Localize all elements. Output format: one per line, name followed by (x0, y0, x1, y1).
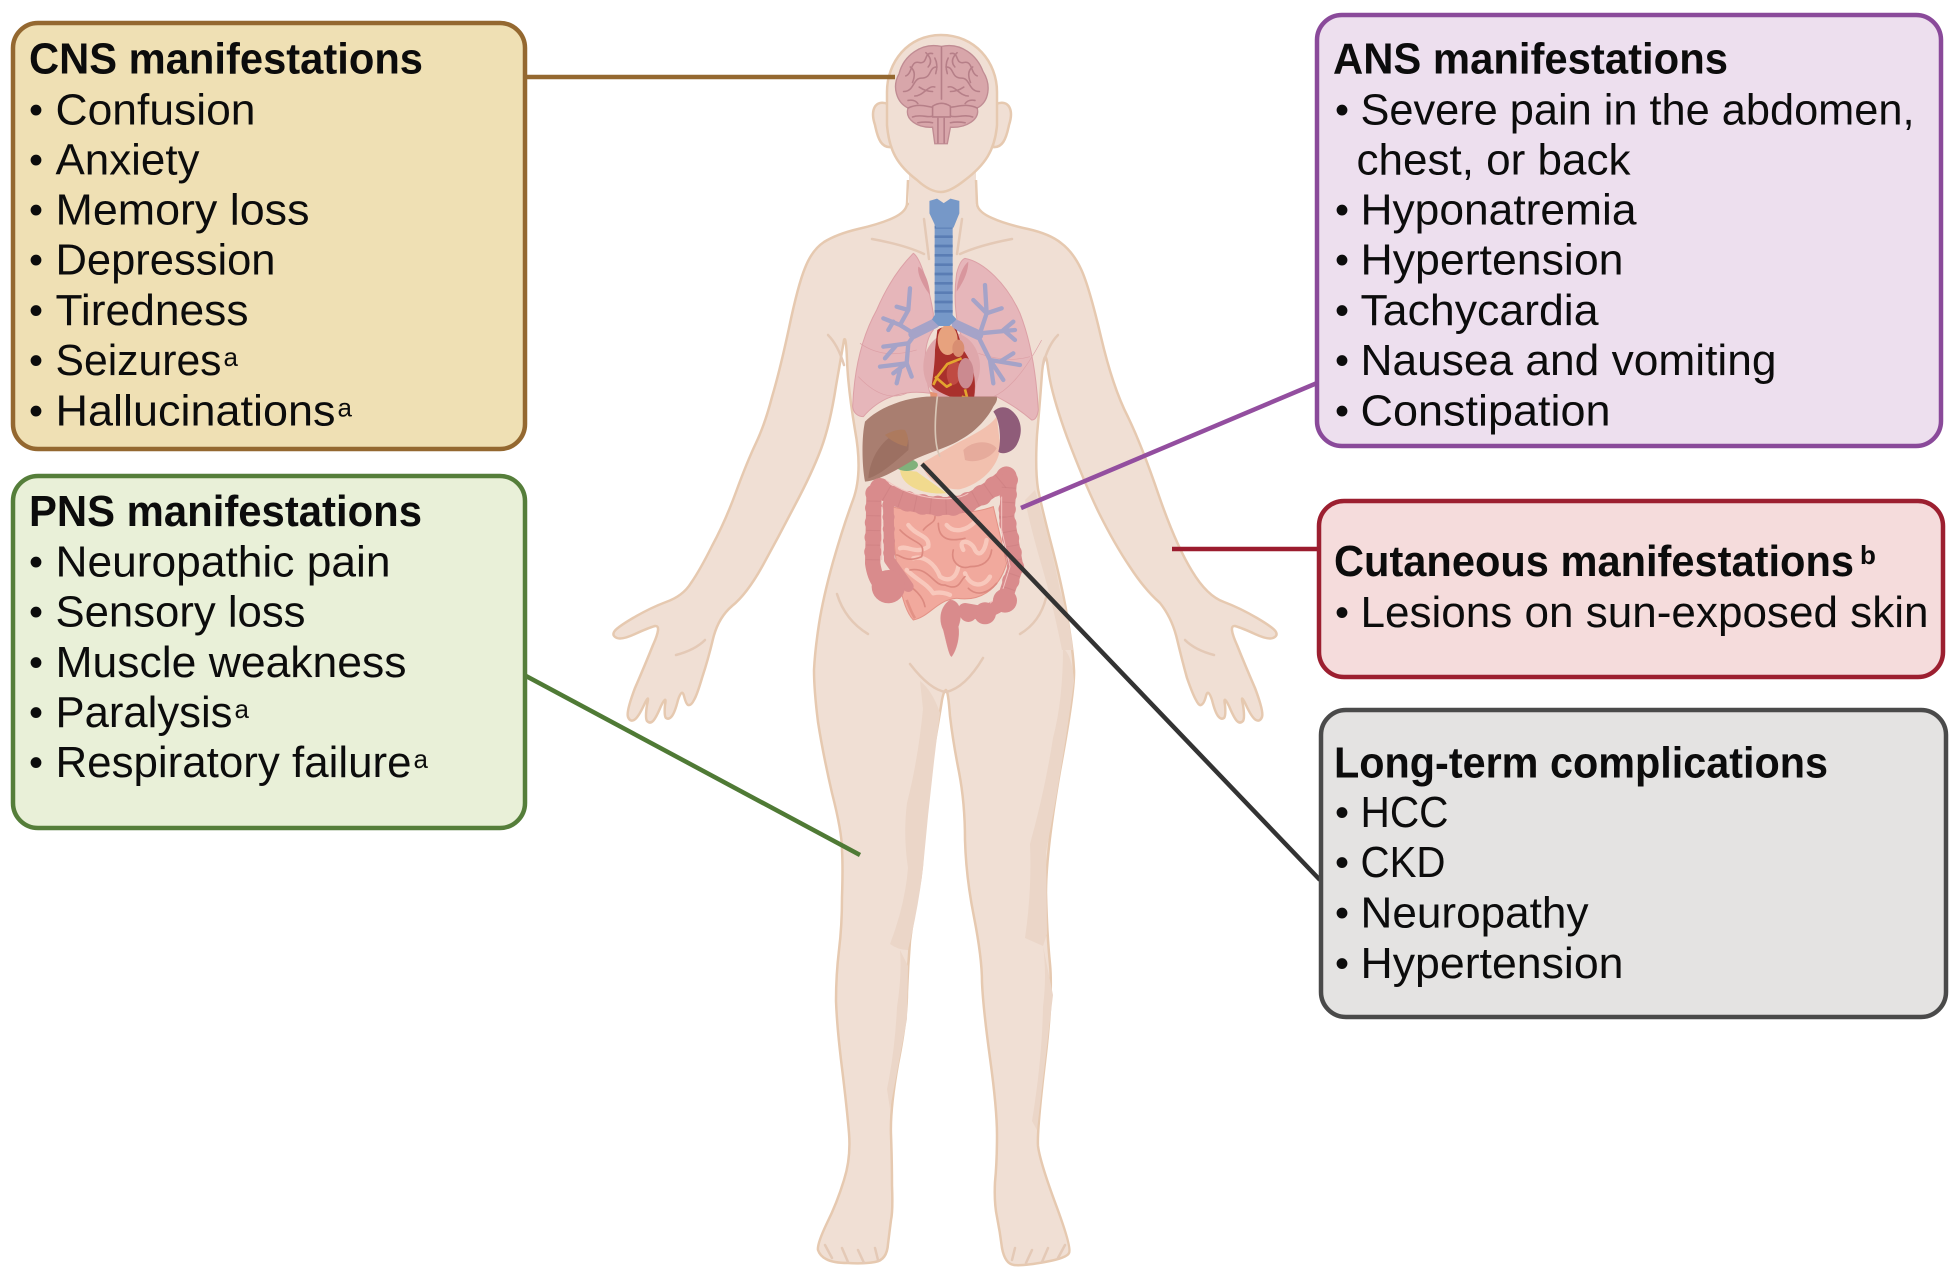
connector: CNS (525, 75, 895, 79)
list: ANS symptoms: Tachycardia (1360, 286, 1599, 335)
icon: small intestine (892, 507, 1007, 620)
list: cutaneous symptoms: • (1335, 591, 1349, 635)
list: ANS symptoms: • (1335, 289, 1349, 333)
right lung (955, 258, 1038, 420)
list: CNS symptoms: a (338, 392, 352, 422)
head (887, 35, 997, 192)
list: PNS symptoms: Sensory loss (56, 588, 306, 636)
left lung (853, 253, 933, 417)
list: complications: • (1335, 892, 1349, 936)
heading: cutaneous: Cutaneous manifestations (1334, 537, 1854, 586)
list: PNS symptoms: • (29, 641, 43, 685)
icon: spleen (993, 407, 1021, 453)
icon: larynx (929, 199, 959, 228)
stomach and gallbladder and pancreas (895, 417, 1000, 494)
list: ANS symptoms: Nausea and vomiting (1360, 336, 1776, 385)
torso organs (853, 217, 1042, 657)
list: PNS symptoms: a (234, 694, 250, 724)
list: CNS symptoms: a (224, 342, 238, 372)
connector: long-term complications (922, 464, 1320, 880)
list: PNS symptoms: • (29, 590, 43, 634)
icon: large intestine (872, 476, 1017, 657)
list: CNS symptoms: Tiredness (56, 286, 248, 335)
list: CNS symptoms: • (29, 88, 43, 132)
list: ANS symptoms: • (1335, 188, 1349, 232)
list: complications: Hypertension (1360, 939, 1624, 988)
list: ANS symptoms: • (1335, 88, 1349, 132)
connector: ANS (1021, 383, 1317, 508)
list: PNS symptoms: Respiratory failure (56, 738, 412, 787)
list: complications: • (1335, 841, 1349, 885)
list: CNS symptoms: • (29, 238, 43, 282)
list: CNS symptoms: • (29, 390, 43, 434)
list: PNS symptoms: Paralysis (56, 688, 232, 737)
list: CNS symptoms: Confusion (56, 86, 256, 134)
icon: heart (923, 325, 980, 401)
list: PNS symptoms: • (29, 540, 43, 584)
human body figure (613, 35, 1277, 1265)
body silhouette (613, 204, 1277, 1265)
bronchial tree (880, 285, 1020, 383)
neck and ears (873, 103, 1011, 217)
list: ANS symptoms: Severe pain in the abdomen, (1360, 86, 1914, 134)
list: CNS symptoms: • (29, 188, 43, 232)
panel: ANS manifestations (1317, 15, 1941, 446)
list: complications: HCC (1360, 788, 1448, 837)
list: CNS symptoms: • (29, 339, 43, 383)
connector: cutaneous (1172, 547, 1318, 551)
icon: trachea (932, 217, 957, 326)
heading: CNS: CNS manifestations (29, 34, 423, 84)
list: complications: CKD (1360, 838, 1446, 887)
body creases (676, 219, 1214, 1263)
connector: PNS (526, 676, 860, 855)
list: PNS symptoms: a (414, 744, 428, 774)
icon: liver (862, 396, 997, 482)
list: cutaneous symptoms: Lesions on sun-exposed skin (1360, 588, 1928, 637)
list: PNS symptoms (29, 538, 428, 787)
heading: ANS: ANS manifestations (1333, 34, 1728, 84)
heading: PNS: PNS manifestations (29, 487, 422, 536)
list: complications: Neuropathy (1360, 888, 1588, 938)
list: ANS symptoms (1335, 86, 1914, 436)
list: complications: • (1335, 791, 1349, 835)
panel: CNS manifestations (13, 23, 525, 449)
panel: cutaneous manifestations (1319, 501, 1943, 677)
list: ANS symptoms: • (1335, 339, 1349, 383)
list: CNS symptoms: Depression (56, 236, 276, 284)
lung details (858, 262, 1042, 397)
heading: long-term complications: Long-term complications (1334, 738, 1828, 788)
list: PNS symptoms: Neuropathic pain (56, 538, 390, 586)
list: CNS symptoms: • (29, 289, 43, 333)
list: ANS symptoms: Hypertension (1360, 236, 1624, 284)
list: PNS symptoms: • (29, 691, 43, 735)
list: CNS symptoms: Anxiety (56, 136, 200, 184)
icon: brain (896, 46, 988, 144)
leg and torso shading (887, 490, 1074, 1130)
list: complications: • (1335, 942, 1349, 986)
heading: cutaneous: b (1860, 540, 1876, 570)
list: ANS symptoms: Hyponatremia (1360, 186, 1637, 234)
list: ANS symptoms: • (1335, 390, 1349, 434)
list: CNS symptoms: Hallucinations (56, 386, 336, 436)
list: CNS symptoms (29, 86, 352, 436)
list: ANS symptoms: chest, or back (1356, 136, 1631, 184)
list: ANS symptoms: Constipation (1360, 386, 1610, 436)
panel: long-term complications (1321, 710, 1946, 1017)
list: ANS symptoms: • (1335, 238, 1349, 282)
list: PNS symptoms: Muscle weakness (56, 638, 406, 687)
list: CNS symptoms: Memory loss (56, 186, 310, 234)
list: complications (1335, 788, 1624, 988)
list: CNS symptoms: • (29, 138, 43, 182)
panel: PNS manifestations (13, 476, 525, 828)
list: PNS symptoms: • (29, 741, 43, 785)
list: CNS symptoms: Seizures (56, 336, 222, 385)
